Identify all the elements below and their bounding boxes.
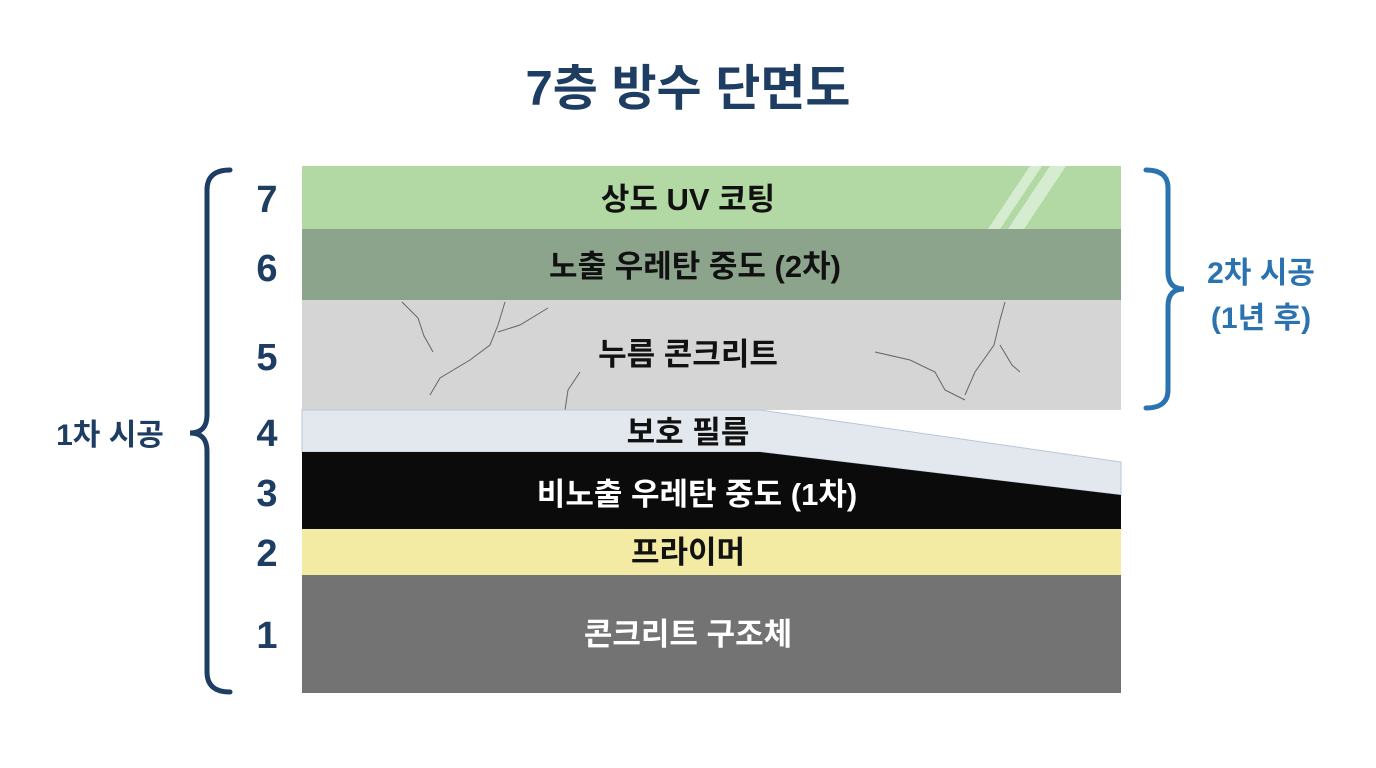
layer 5: press concrete [302,300,1121,410]
layer numbers: 1 [256,615,278,657]
layer 7: top UV coating [302,166,1121,229]
layer numbers: 7 [256,179,278,221]
layer 4: protective film [302,410,1121,495]
right brace: 2nd construction: 2차 시공 [1207,257,1315,290]
layer numbers: 5 [256,337,278,379]
layer 3: non-exposed urethane [302,452,1121,529]
layer 1: concrete structure: 콘크리트 구조체 [584,617,792,652]
layer 4: protective film: 보호 필름 [627,415,749,450]
layer numbers: 2 [256,533,278,575]
layer 1: concrete structure [302,575,1121,693]
layer numbers: 3 [256,473,278,515]
layer 7: top UV coating: 상도 UV 코팅 [601,182,775,217]
layer 3: non-exposed urethane: 비노출 우레탄 중도 (1차) [537,477,857,512]
layer numbers: 4 [256,413,278,455]
layer 6: exposed urethane [302,229,1121,300]
layer 5: press concrete: 누름 콘크리트 [598,337,778,372]
left brace: 1st construction: 1차 시공 [56,419,164,452]
layer 2: primer: 프라이머 [631,535,745,570]
layer 6: exposed urethane: 노출 우레탄 중도 (2차) [549,249,841,284]
layer numbers [256,179,278,657]
layer numbers: 6 [256,248,278,290]
left brace: 1st construction [56,170,230,692]
layer 2: primer [302,529,1121,575]
right brace: 2nd construction: (1년 후) [1211,302,1311,335]
title: 7층 방수 단면도 [526,62,850,116]
right brace: 2nd construction [1146,170,1315,408]
